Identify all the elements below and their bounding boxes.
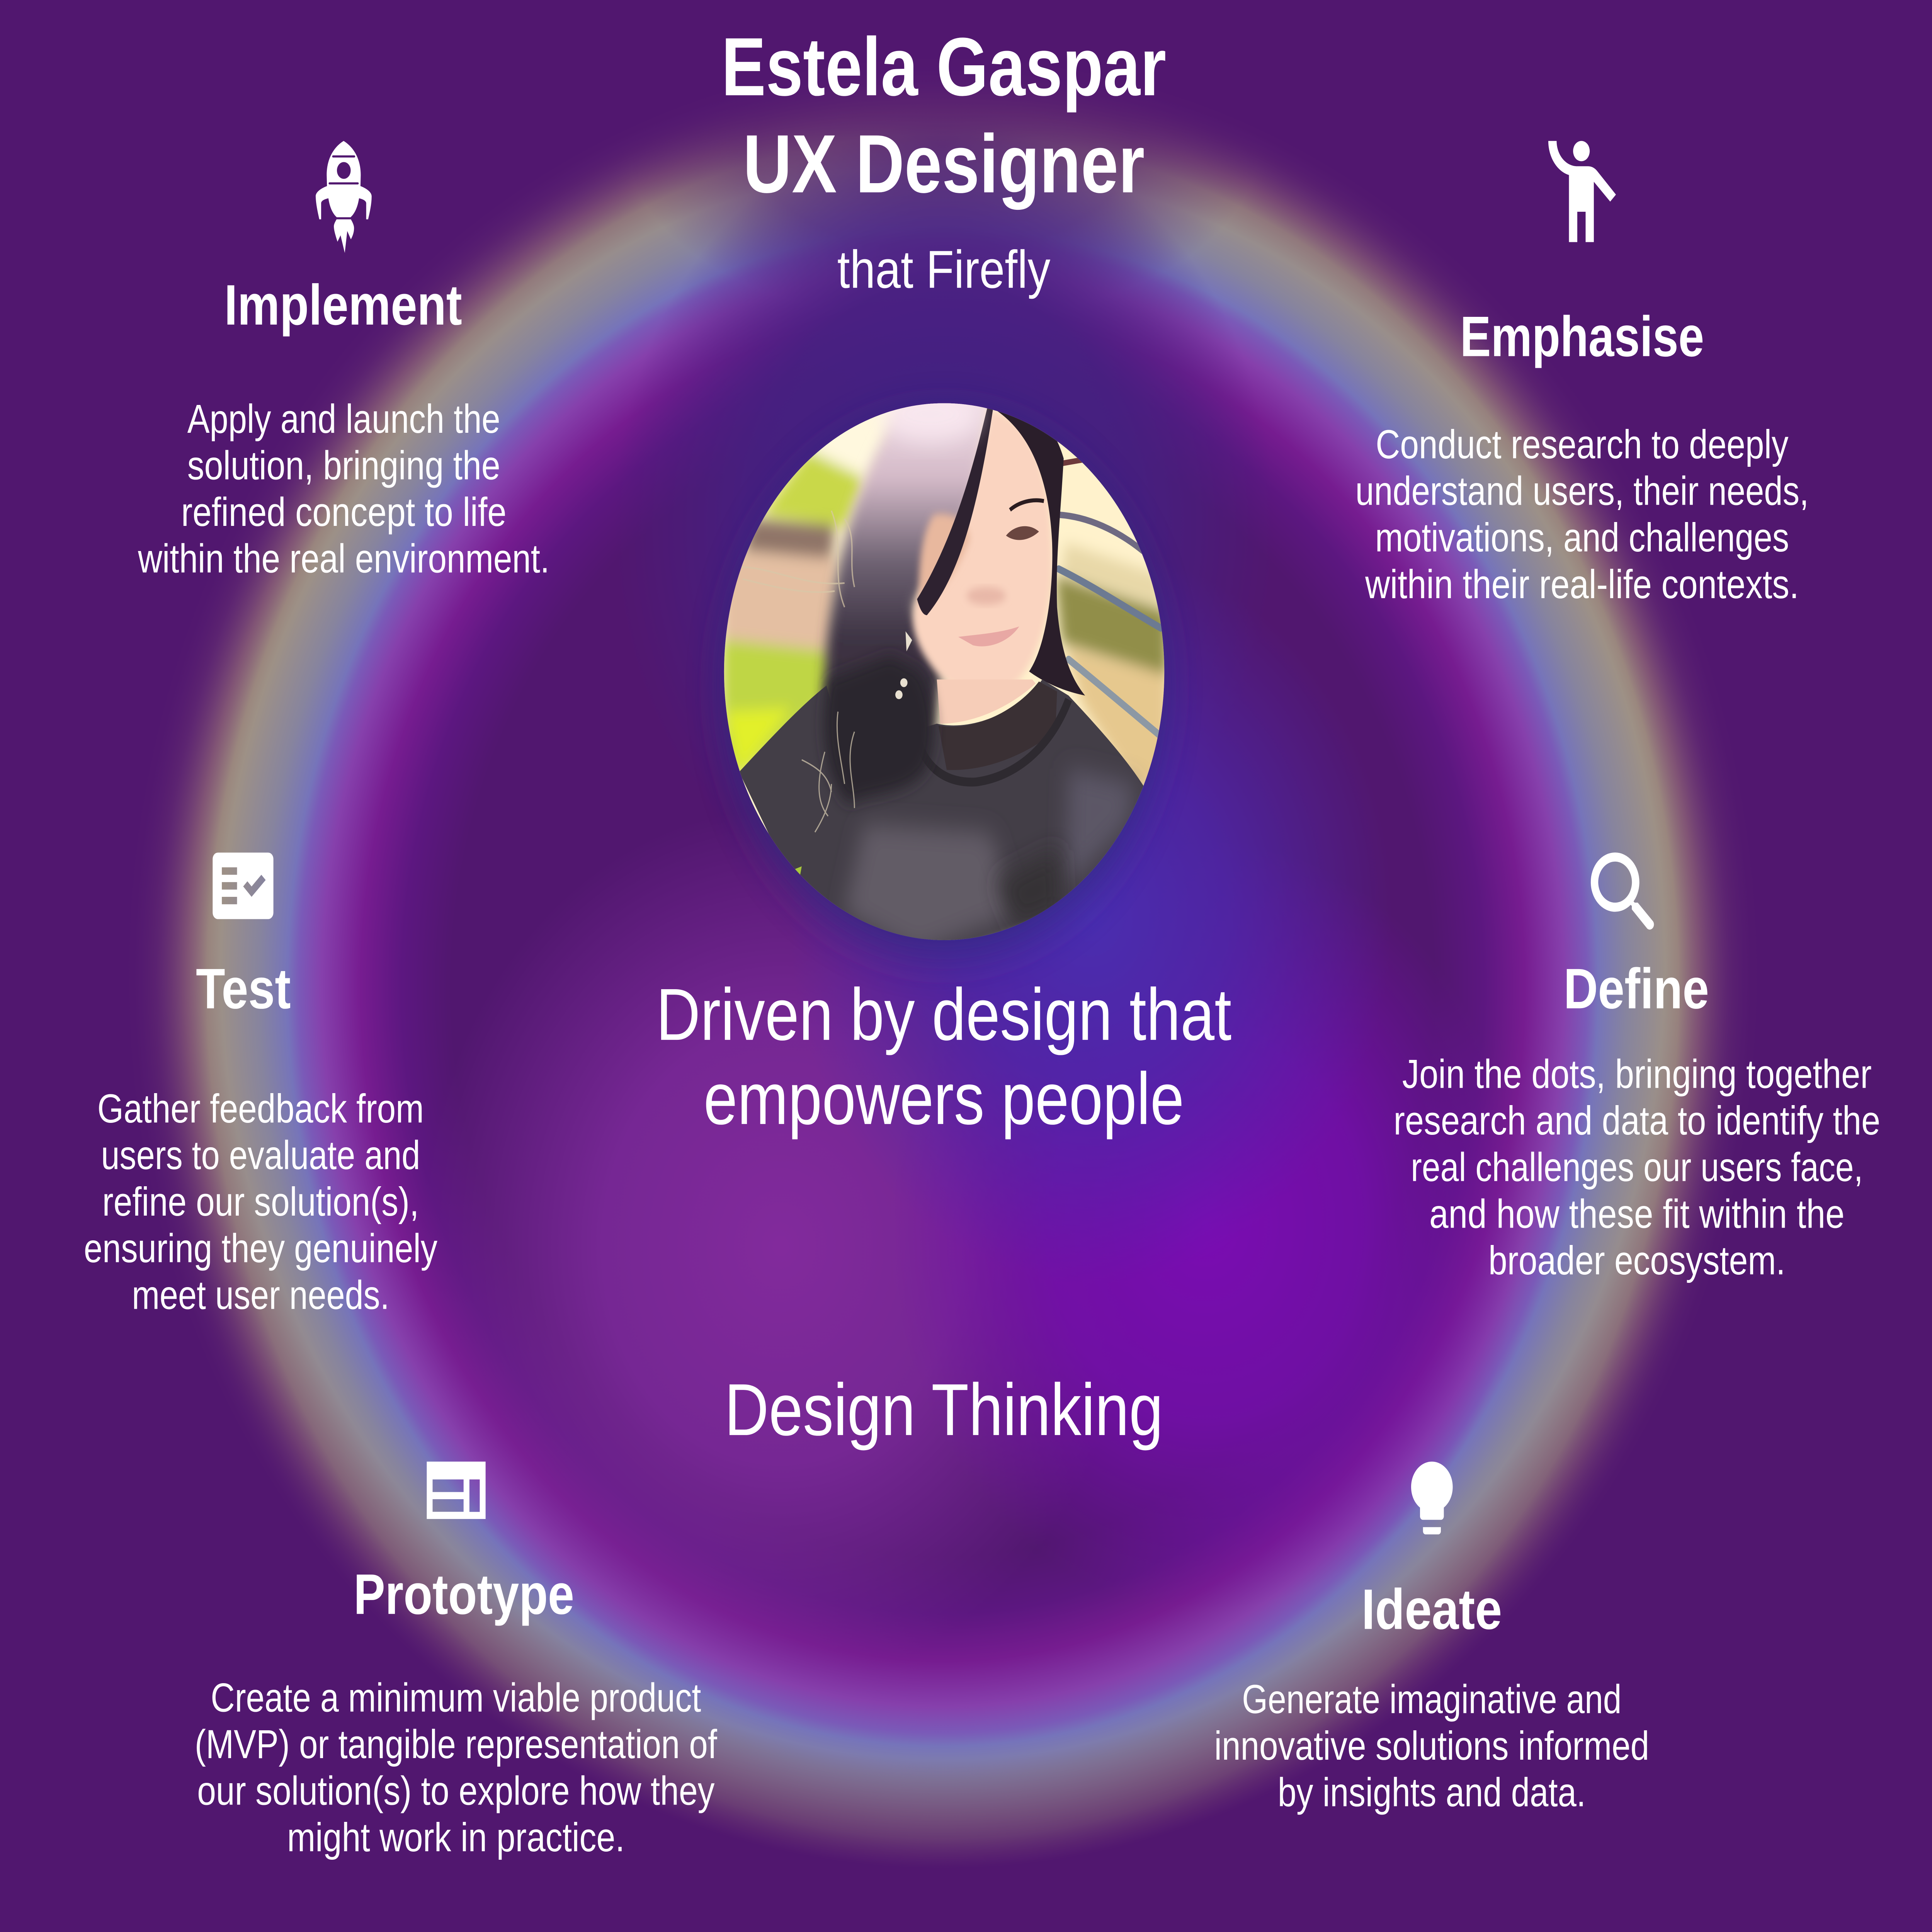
text block	[1355, 422, 1809, 607]
eye, brow, lips, nose	[1010, 500, 1044, 510]
text block: Create a minimum viable product	[211, 1675, 701, 1720]
text block: might work in practice.	[287, 1815, 625, 1860]
text block: users to evaluate and	[101, 1133, 420, 1178]
text block: Generate imaginative and	[1242, 1677, 1621, 1722]
panel: ideate	[1214, 1462, 1649, 1815]
icon: layout wireframe	[427, 1462, 486, 1519]
text block: meet user needs.	[132, 1272, 389, 1318]
heading: design thinking: Design Thinking	[724, 1368, 1163, 1451]
text block: and how these fit within the	[1429, 1191, 1845, 1236]
text block: within their real-life contexts.	[1365, 562, 1799, 607]
text block: Apply and launch the	[187, 396, 500, 442]
title: role: UX Designer	[743, 118, 1145, 210]
text block	[84, 1086, 437, 1318]
text block: Join the dots, bringing together	[1402, 1052, 1872, 1097]
text block: real challenges our users face,	[1411, 1145, 1863, 1190]
panel: prototype	[195, 1462, 717, 1860]
text block: broader ecosystem.	[1488, 1238, 1786, 1283]
icon: person waving	[1548, 141, 1616, 242]
text block: our solution(s) to explore how they	[197, 1769, 715, 1814]
text block: understand users, their needs,	[1355, 469, 1809, 514]
shirt	[739, 679, 1146, 961]
text block: Gather feedback from	[97, 1086, 424, 1131]
lower hair over shirt	[824, 655, 934, 804]
icon: light bulb	[1411, 1462, 1453, 1534]
text block: refine our solution(s),	[102, 1179, 419, 1225]
text block	[138, 396, 549, 582]
text block: Conduct research to deeply	[1376, 422, 1789, 467]
portrait photo	[724, 403, 1165, 940]
icon: magnifier	[1595, 857, 1654, 930]
face	[913, 410, 1053, 694]
text block: ensuring they genuinely	[84, 1226, 437, 1271]
panel: implement	[138, 141, 549, 582]
text block	[1394, 1052, 1880, 1283]
text block: research and data to identify the	[1394, 1098, 1880, 1143]
heading: Define	[1564, 957, 1709, 1020]
heading: Emphasise	[1460, 304, 1704, 368]
tagline: empowers people	[704, 1057, 1184, 1139]
text block	[195, 1675, 717, 1860]
icon: rocket	[316, 141, 372, 253]
text block: (MVP) or tangible representation of	[195, 1722, 717, 1767]
heading: Test	[196, 957, 291, 1020]
text block: by insights and data.	[1278, 1770, 1586, 1815]
text block: innovative solutions informed	[1214, 1723, 1649, 1769]
tagline: Driven by design that	[656, 973, 1231, 1056]
panel: emphasise	[1355, 141, 1809, 607]
title block	[721, 21, 1166, 299]
heading: Implement	[224, 273, 462, 337]
title: name: Estela Gaspar	[721, 21, 1166, 113]
icon: checklist card	[213, 853, 274, 919]
right hair	[996, 398, 1085, 696]
text block: solution, bringing the	[187, 443, 500, 488]
text block: refined concept to life	[181, 490, 507, 535]
panel: define	[1394, 857, 1880, 1283]
earring	[895, 631, 912, 699]
portrait shadow	[723, 417, 1165, 956]
text block: within the real environment.	[138, 536, 549, 582]
text block: motivations, and challenges	[1375, 515, 1789, 560]
text block	[1214, 1677, 1649, 1815]
hair	[824, 386, 993, 804]
panel: test	[84, 853, 437, 1318]
heading: Ideate	[1362, 1577, 1502, 1641]
heading: Prototype	[354, 1562, 574, 1626]
top glare	[881, 386, 980, 442]
subtitle: that Firefly	[837, 240, 1050, 299]
tagline	[656, 973, 1231, 1139]
